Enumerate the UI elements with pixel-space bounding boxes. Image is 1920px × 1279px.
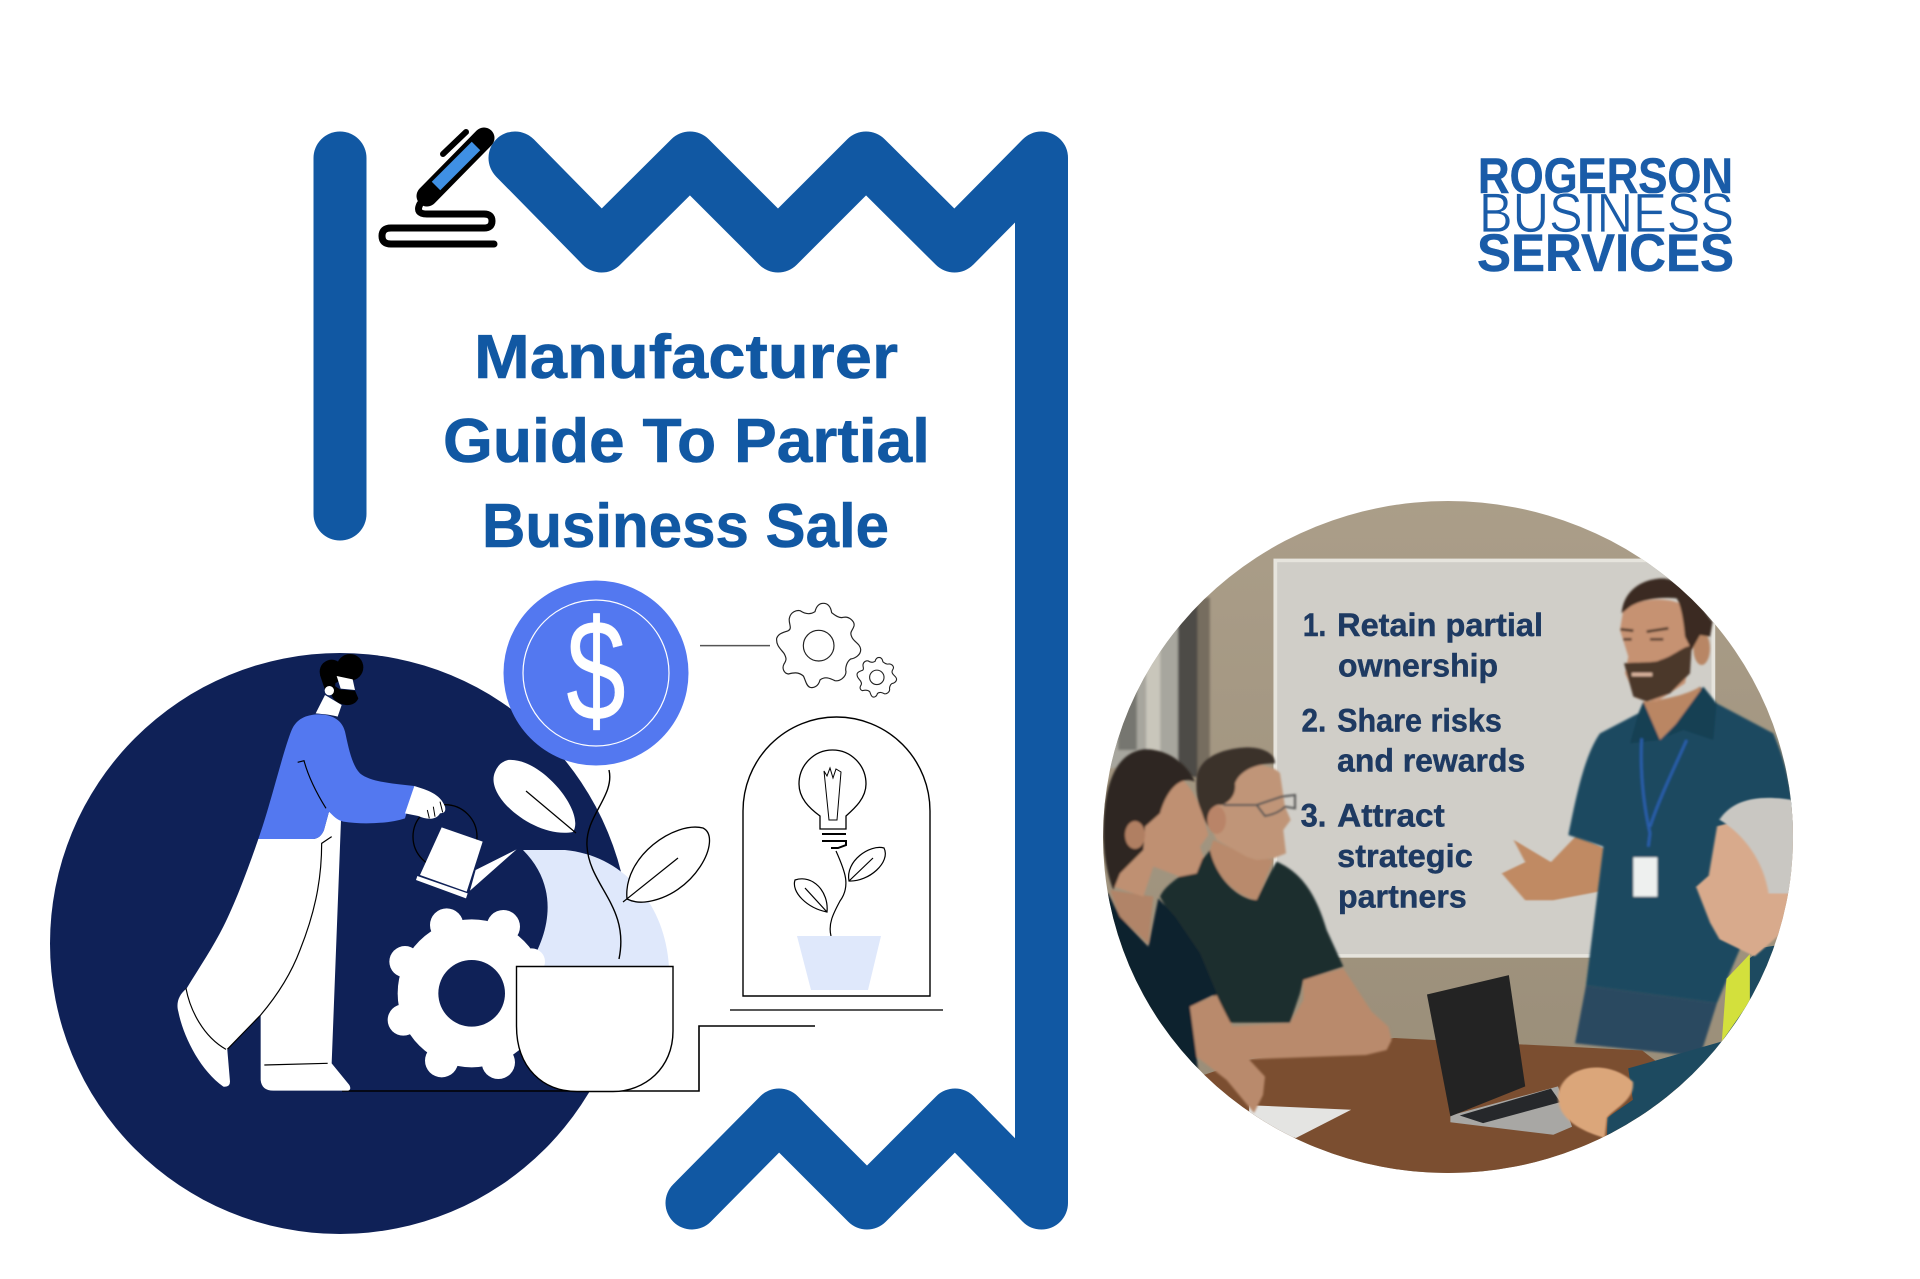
illustration: connector line and gears [700,603,897,697]
wall [1103,501,1793,1173]
dome [743,717,930,996]
illustration: ground line [342,1026,815,1091]
seated man with glasses and woman [1103,746,1392,1114]
yellow vest [1722,954,1750,1042]
whiteboard list: Retain partial [1337,607,1543,643]
face [1620,600,1692,702]
illustration: dollar coin [504,580,688,766]
whiteboard list: ownership [1338,647,1498,683]
clasped hands [1558,1068,1633,1138]
title: Guide To Partial [443,407,930,476]
collar [1630,687,1717,743]
woman ear [1125,821,1145,849]
badge [1633,857,1657,897]
lanyard [1641,738,1687,847]
woman arm and hand [1190,995,1265,1113]
woman face [1113,777,1208,897]
face [1696,804,1801,956]
connector line [700,643,770,648]
face [337,676,355,690]
photo: team meeting in front of whiteboard [1103,501,1793,1173]
table [1204,1038,1684,1173]
shelf line [730,1009,943,1011]
illustration: dark navy circle backdrop [50,653,630,1234]
room, whiteboard and table [1103,501,1793,1173]
illustration: glass dome with lightbulb plant [730,717,943,1010]
logo: Rogerson Business Services: BUSINESS [1479,181,1734,244]
whiteboard list: Attract [1337,797,1445,834]
whiteboard list: Share risks [1337,702,1502,739]
whiteboard list: strategic [1337,838,1473,874]
watering can body [420,827,483,892]
hair [1622,578,1713,650]
big outlined gear [777,603,861,688]
beard [1624,646,1692,702]
bulb base [822,834,846,848]
whiteboard list: 3. [1301,797,1326,834]
trouser detail lines [186,837,332,1065]
whiteboard list [1301,607,1543,914]
paper [1249,1105,1351,1138]
sweater fold line [298,761,326,808]
grey hair [1719,798,1801,894]
woman shirt [1100,893,1217,1173]
panel: receipt frame left bar [314,158,366,514]
bulb plant leaves [849,847,885,881]
man face [1204,763,1291,860]
woman hair [1103,749,1195,890]
neck [1643,687,1703,740]
ear [325,686,334,695]
watering can band [416,876,468,898]
man neck [1210,840,1273,900]
title [443,323,930,561]
logo: Rogerson Business Services [1477,148,1734,283]
hair [320,654,363,705]
illustration: light blue dome [523,850,669,967]
table, paper and laptop [1204,1038,1684,1173]
laptop [1427,975,1572,1135]
whiteboard [1275,560,1713,956]
man shirt [1160,850,1343,1023]
illustration: man watering plant [177,654,517,1091]
watering can spout [470,849,517,891]
logo: Rogerson Business Services: ROGERSON [1478,148,1733,204]
hand [405,786,445,819]
jacket [1607,946,1774,1136]
legs and shoes [177,812,350,1091]
logo: Rogerson Business Services: SERVICES [1477,224,1734,283]
man ear [1207,806,1226,834]
ear [1693,632,1710,665]
title: Manufacturer [474,323,898,392]
man arm and hand [1227,968,1392,1059]
icon: pen with scribble [382,132,494,244]
watering can handle [413,805,477,869]
whiteboard list: 2. [1302,702,1326,739]
illustration: white gear [388,908,546,1079]
stem [830,851,846,936]
title: Business Sale [482,492,889,561]
presenter [1568,578,1793,1057]
small outlined gear [857,657,897,697]
illustration: outlined leaf [623,827,710,902]
man glasses [1223,795,1295,816]
finger lines [427,802,443,818]
polo shirt [1568,687,1793,1003]
window [1110,596,1211,778]
illustration: dollar coin: $ [566,589,626,751]
mouth [1632,673,1652,676]
man hair [1196,747,1275,827]
illustration: white pot [516,966,673,1092]
whiteboard list: and rewards [1337,742,1525,778]
eyes and brows [1621,628,1668,632]
whiteboard list: partners [1338,878,1467,914]
blue sweater [258,714,414,839]
laptop and seated man with yellow vest [1427,798,1820,1138]
filament [824,768,841,820]
trousers [1575,985,1717,1057]
panel: receipt frame zigzag top, right side and bottom [515,158,1042,1203]
woman neck [1110,890,1153,943]
light blue pot [797,936,881,990]
neck [316,695,342,717]
illustration: plant stem [587,770,621,959]
whiteboard list: 1. [1303,607,1326,643]
illustration: white leaf [494,760,576,833]
presenter forearm and hand [1502,835,1605,900]
bulb [799,750,866,829]
